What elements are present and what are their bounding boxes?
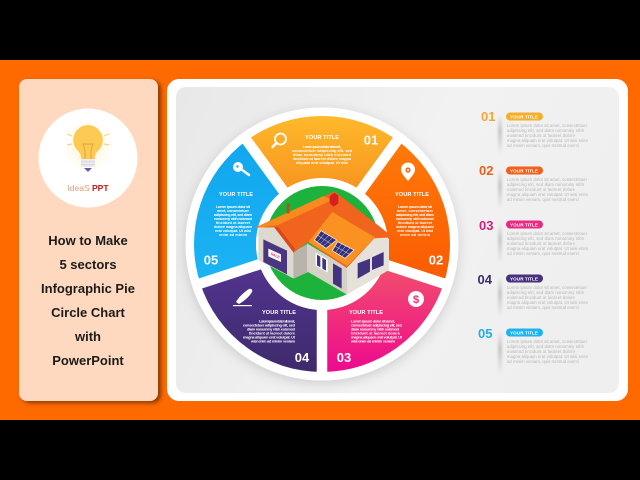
sector 04 text xyxy=(243,320,296,344)
sector 05 text: adipiscing elit, sed diam xyxy=(214,213,253,217)
left wall with garage: SALE xyxy=(270,252,281,260)
icon: magnifier xyxy=(272,134,286,147)
sector 04 title: YOUR TITLE xyxy=(262,310,296,316)
sector 01 text: tincidunt ut laoreet dolore magna xyxy=(293,157,352,161)
list item 01: euismod tincidunt ut laoreet dolore xyxy=(507,133,576,138)
list item 02: euismod tincidunt ut laoreet dolore xyxy=(507,187,576,192)
sector 04 number: 04 xyxy=(295,350,310,365)
sector 02 text: enim ad minim xyxy=(400,233,431,237)
sector 04 text: tincidunt ut laoreet dolore xyxy=(249,332,295,336)
list item 03: 03 xyxy=(479,218,493,233)
list item 01: magna aliquam erat volutpat. Ut wisi enim xyxy=(507,138,588,143)
list item 02: adipiscing elit, sed diam nonummy nibh xyxy=(507,182,585,187)
list item 02: magna aliquam erat volutpat. Ut wisi enim xyxy=(507,192,588,197)
sector 02 text xyxy=(396,205,435,237)
sector 05 text: Lorem ipsum dolor sit xyxy=(216,205,251,209)
list item 05: YOUR TITLE xyxy=(510,330,538,335)
list item 04: YOUR TITLE xyxy=(510,276,538,281)
house illustration xyxy=(255,191,393,295)
list item 02: Lorem ipsum dolor sit amet, consectetuer xyxy=(507,177,588,182)
list item 05: magna aliquam erat volutpat. Ut wisi enim xyxy=(507,354,588,359)
sidebar title: PowerPoint xyxy=(52,353,124,368)
sector 03 xyxy=(322,264,444,372)
sidebar title: How to Make xyxy=(48,233,128,248)
sector 02 text: tincidunt ut laoreet xyxy=(398,221,433,225)
sector 02 text: nonummy nibh euismod xyxy=(396,217,435,221)
list item 05: Lorem ipsum dolor sit amet, consectetuer xyxy=(507,339,588,344)
sector 02 text: erat volutpat. Ut wisi xyxy=(397,229,433,233)
sector 02 text: Lorem ipsum dolor sit xyxy=(398,205,433,209)
sector 04 text: consectetuer adipiscing elit, sed xyxy=(243,324,296,328)
sector 05 text: dolore magna aliquam xyxy=(214,225,253,229)
list item 01: Lorem ipsum dolor sit amet, consectetuer xyxy=(507,123,588,128)
sector 03 text: consectetuer adipiscing elit, sed xyxy=(351,324,403,328)
sector gaps xyxy=(198,139,446,374)
list item 05: 05 xyxy=(478,326,492,341)
sector 05 text xyxy=(214,205,253,237)
list item 01: adipiscing elit, sed diam nonummy nibh xyxy=(507,128,585,133)
sector 01 title: YOUR TITLE xyxy=(305,135,339,141)
list item 04: Lorem ipsum dolor sit amet, consectetuer xyxy=(507,285,588,290)
sector 05 number: 05 xyxy=(204,252,218,268)
list item 03: adipiscing elit, sed diam nonummy nibh xyxy=(507,236,585,241)
list item 03: euismod tincidunt ut laoreet dolore xyxy=(507,241,576,246)
list item 02: ad minim veniam, quis nostrud exerci xyxy=(507,197,579,202)
sector 01 xyxy=(247,116,397,191)
list item 05: euismod tincidunt ut laoreet dolore xyxy=(507,349,576,354)
sector 03 number: 03 xyxy=(337,350,351,365)
list item 03 xyxy=(479,218,588,263)
list item 05: adipiscing elit, sed diam nonummy nibh xyxy=(507,344,585,349)
chimney xyxy=(287,193,338,213)
list item 05: ad minim veniam, quis nostrud exerci xyxy=(507,359,579,364)
sector 05 title: YOUR TITLE xyxy=(219,192,253,198)
list item 03: Lorem ipsum dolor sit amet, consectetuer xyxy=(507,231,588,236)
list item 03: ad minim veniam, quis nostrud exerci xyxy=(507,251,579,256)
sector 03 text xyxy=(350,320,403,344)
list item 04: adipiscing elit, sed diam nonummy nibh xyxy=(507,290,585,295)
icon: key xyxy=(233,162,249,175)
list item 04: magna aliquam erat volutpat. Ut wisi enim xyxy=(507,300,588,305)
sector 02 xyxy=(361,140,450,284)
sector 04 text: diam nonummy nibh euismod xyxy=(247,328,296,332)
sector 01 text: consectetuer adipiscing elit, sed xyxy=(292,149,353,153)
icon: pen xyxy=(233,289,252,306)
list item 01: 01 xyxy=(481,109,495,124)
list item 02: YOUR TITLE xyxy=(510,168,538,173)
sector 03 text: tincidunt ut laoreet dolore xyxy=(351,332,400,336)
solar panels xyxy=(314,231,354,258)
sector 02 text: amet, consectetuer xyxy=(397,209,434,213)
list item 01: YOUR TITLE xyxy=(510,114,538,119)
panel: main xyxy=(167,79,628,401)
list item 04: ad minim veniam, quis nostrud exerci xyxy=(507,305,579,310)
sector 05 xyxy=(194,140,283,284)
sector 05 text: enim ad minim xyxy=(219,233,248,237)
sidebar title: 5 sectors xyxy=(59,257,117,272)
list item 02 xyxy=(479,163,588,209)
sidebar title xyxy=(41,233,135,368)
sector 04 text: magna aliquam erat volutpat. Ut xyxy=(243,336,296,340)
middle walls xyxy=(294,237,389,295)
list item 05 xyxy=(478,326,588,375)
icon: map pin xyxy=(401,162,415,181)
sector 03 text: Lorem ipsum dolor sit amet, xyxy=(351,320,395,324)
sector 04 text: wisi enim ad minim veniam xyxy=(250,340,296,344)
sector 03 title: YOUR TITLE xyxy=(349,310,383,316)
center hub xyxy=(256,178,388,310)
sector 03 text: magna aliquam erat volutpat. Ut xyxy=(351,336,403,340)
sector 01 text: aliquam erat volutpat. Ut wisi xyxy=(296,161,348,165)
list item 01: ad minim veniam, quis nostrud exerci xyxy=(507,143,579,148)
sector 02 text: dolore magna aliquam xyxy=(396,225,435,229)
sector 04 text: Lorem ipsum dolor sit amet, xyxy=(259,320,295,324)
sector 01 text: diam nonummy nibh euismod xyxy=(293,153,352,157)
sidebar title: Infographic Pie xyxy=(41,281,135,296)
logo xyxy=(38,108,138,208)
sidebar title: with xyxy=(74,329,101,344)
pie chart xyxy=(186,108,458,380)
logo text: IdeaS PPT xyxy=(67,183,109,193)
list item 02: 02 xyxy=(479,163,493,178)
list item 03: magna aliquam erat volutpat. Ut wisi enim xyxy=(507,246,588,251)
list item 04: euismod tincidunt ut laoreet dolore xyxy=(507,295,576,300)
sector 05 text: amet, consectetuer xyxy=(217,209,250,213)
sector 02 number: 02 xyxy=(429,252,443,268)
sidebar title: Circle Chart xyxy=(51,305,126,320)
icon: light bulb xyxy=(61,119,115,173)
sector 01 number: 01 xyxy=(364,132,378,148)
sector 05 text: erat volutpat. Ut wisi xyxy=(215,229,251,233)
sector 03 text: diam nonummy nibh euismod xyxy=(351,328,400,332)
house windows and door xyxy=(316,252,384,289)
sector 01 text xyxy=(292,145,353,165)
panel: sidebar xyxy=(19,79,158,401)
list item 04: 04 xyxy=(478,272,493,287)
roof xyxy=(255,191,393,268)
sector 04 xyxy=(200,264,322,372)
list item 01 xyxy=(481,109,588,155)
sector 01 text: Lorem ipsum dolor sit amet, xyxy=(303,145,341,149)
sector 05 text: nonummy nibh euismod xyxy=(214,217,253,221)
sector 05 text: tincidunt ut laoreet xyxy=(216,221,251,225)
icon: dollar: $ xyxy=(413,294,419,306)
sector 02 title: YOUR TITLE xyxy=(395,192,429,198)
list item 04 xyxy=(478,272,588,317)
list item 03: YOUR TITLE xyxy=(510,222,538,227)
sector 03 text: wisi enim ad minim veniam xyxy=(350,340,396,344)
sector 02 text: adipiscing elit, sed diam xyxy=(396,213,435,217)
